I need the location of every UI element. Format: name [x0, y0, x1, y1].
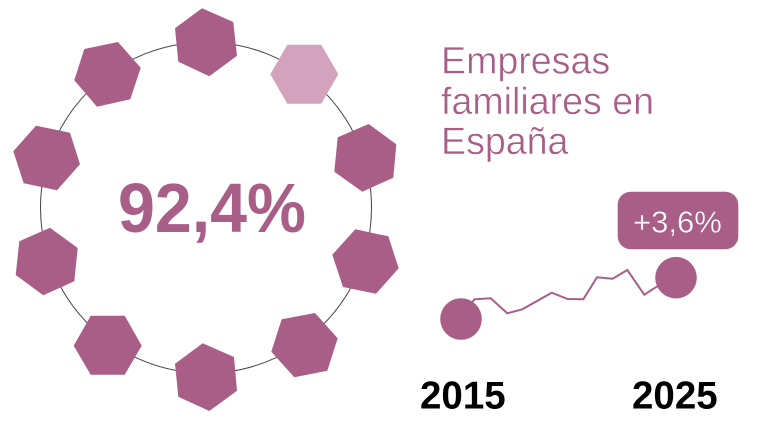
title: España — [441, 120, 569, 162]
hexagon: top — [175, 8, 237, 76]
hexagon: bottom — [175, 343, 237, 411]
main percentage: 92,4% — [118, 169, 306, 247]
hexagon: bottom right — [271, 313, 338, 377]
hexagon: left upper — [13, 126, 80, 190]
callout: change — [618, 192, 738, 249]
title: Empresas — [441, 39, 610, 81]
hexagon: right lower — [332, 229, 399, 294]
year label 2015: 2015 — [420, 374, 506, 418]
hexagon: left lower — [16, 228, 78, 295]
end point 2025 — [655, 257, 697, 299]
hexagon: highlighted remainder — [270, 45, 338, 104]
trend line chart — [440, 257, 697, 340]
title: familiares en — [441, 80, 654, 122]
hexagon: top left — [74, 42, 141, 107]
hexagon: right upper — [334, 124, 396, 192]
callout: change: +3,6% — [633, 204, 722, 239]
ring of hexagons — [13, 8, 399, 411]
hexagon: bottom left — [74, 316, 142, 375]
title — [441, 39, 654, 162]
year label 2025: 2025 — [632, 374, 718, 418]
start point 2015 — [440, 298, 482, 340]
